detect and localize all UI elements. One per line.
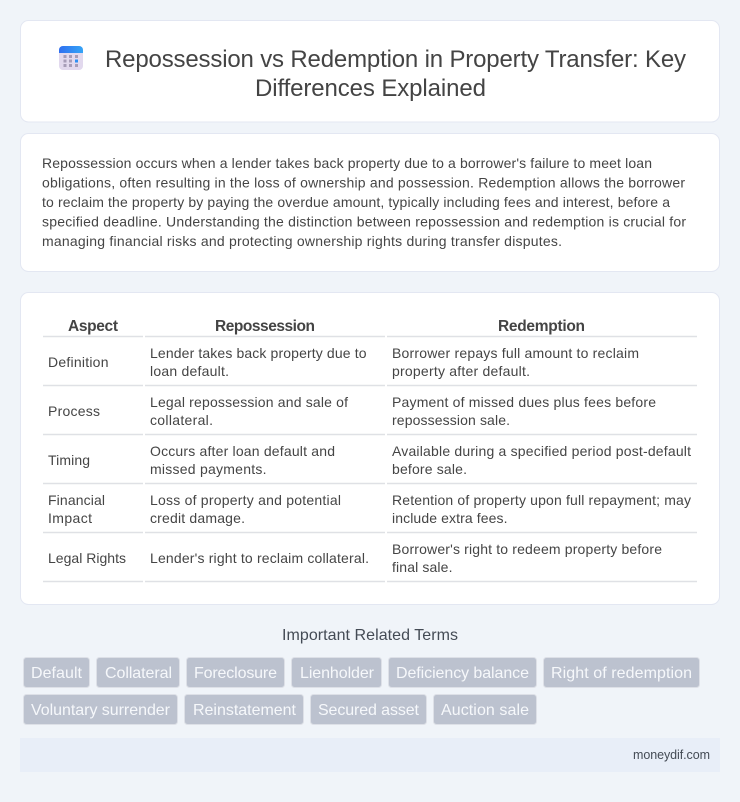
text block: definition summary: Repossession occurs when a lender takes back property due to a borrower's failure to meet loan bbox=[42, 155, 652, 171]
panel: comparison table bbox=[20, 292, 720, 604]
table row: timing: missed payments. bbox=[150, 461, 266, 477]
table row: timing: Occurs after loan default and bbox=[150, 443, 335, 459]
table row: definition: Definition bbox=[48, 354, 108, 370]
title: Differences Explained bbox=[255, 75, 486, 102]
text block: definition summary: specified deadline. Understanding the distinction between repossession and redemption is crucial for bbox=[42, 214, 686, 230]
text block: definition summary bbox=[42, 155, 686, 249]
table row: definition: property after default. bbox=[392, 363, 530, 379]
table row: financial impact bbox=[48, 492, 691, 526]
table row: legal rights: Borrower's right to redeem property before bbox=[392, 541, 662, 557]
tag list: related terms: Collateral bbox=[105, 665, 172, 682]
table header row: Repossession bbox=[215, 318, 315, 335]
text block: definition summary: to reclaim the property by paying the overdue amount, typically including fees and interest, before a bbox=[42, 194, 670, 210]
tag list: related terms: Auction sale bbox=[441, 702, 529, 719]
title bbox=[105, 46, 686, 102]
table row: timing: Timing bbox=[48, 452, 90, 468]
table row: legal rights bbox=[48, 541, 662, 575]
tag list: related terms: Voluntary surrender bbox=[31, 702, 171, 719]
tag list: related terms: Default bbox=[31, 665, 83, 682]
table row: legal rights: Legal Rights bbox=[48, 550, 126, 566]
table row: definition: Borrower repays full amount to reclaim bbox=[392, 345, 639, 361]
icon: calendar bbox=[59, 46, 83, 70]
table header row bbox=[68, 318, 585, 335]
table row: legal rights: Lender's right to reclaim collateral. bbox=[150, 550, 369, 566]
heading: important related terms: Important Related Terms bbox=[282, 627, 458, 644]
table row: financial impact: Impact bbox=[48, 510, 92, 526]
table row: definition: Lender takes back property due to bbox=[150, 345, 367, 361]
tag list: related terms: Right of redemption bbox=[551, 665, 692, 682]
table header row: Redemption bbox=[498, 318, 585, 335]
table row: timing: Available during a specified period post-default bbox=[392, 443, 691, 459]
table row: process: Payment of missed dues plus fees before bbox=[392, 394, 656, 410]
table row: timing: before sale. bbox=[392, 461, 467, 477]
panel: title header bbox=[20, 20, 720, 122]
table row: legal rights: final sale. bbox=[392, 559, 452, 575]
text block: definition summary: obligations, often resulting in the loss of ownership and possession. Redemption allows the borrower bbox=[42, 174, 685, 190]
footer source credit: moneydif.com bbox=[633, 748, 710, 762]
table row: process: collateral. bbox=[150, 412, 213, 428]
table row: process: repossession sale. bbox=[392, 412, 510, 428]
table row: process: Legal repossession and sale of bbox=[150, 394, 348, 410]
table row: financial impact: Financial bbox=[48, 492, 105, 508]
panel: intro paragraph bbox=[20, 134, 720, 272]
tag list: related terms: Deficiency balance bbox=[396, 665, 529, 682]
tag list: related terms: Reinstatement bbox=[193, 702, 297, 719]
table row: financial impact: include extra fees. bbox=[392, 510, 508, 526]
table row: definition: loan default. bbox=[150, 363, 229, 379]
table header row: Aspect bbox=[68, 318, 118, 335]
table row: financial impact: credit damage. bbox=[150, 510, 245, 526]
tag list: related terms: Foreclosure bbox=[194, 665, 277, 682]
table row: timing bbox=[48, 443, 691, 477]
tag list: related terms bbox=[24, 658, 700, 724]
table row: process: Process bbox=[48, 403, 100, 419]
tag list: related terms: Lienholder bbox=[300, 665, 375, 682]
table row: definition bbox=[48, 345, 639, 379]
title: Repossession vs Redemption in Property Transfer: Key bbox=[105, 46, 686, 73]
text block: definition summary: managing financial risks and protecting ownership rights during transfer disputes. bbox=[42, 233, 562, 249]
table row: financial impact: Retention of property upon full repayment; may bbox=[392, 492, 691, 508]
table row: process bbox=[48, 394, 656, 428]
footer band bbox=[20, 738, 720, 772]
tag list: related terms: Secured asset bbox=[318, 702, 420, 719]
table row: financial impact: Loss of property and potential bbox=[150, 492, 341, 508]
